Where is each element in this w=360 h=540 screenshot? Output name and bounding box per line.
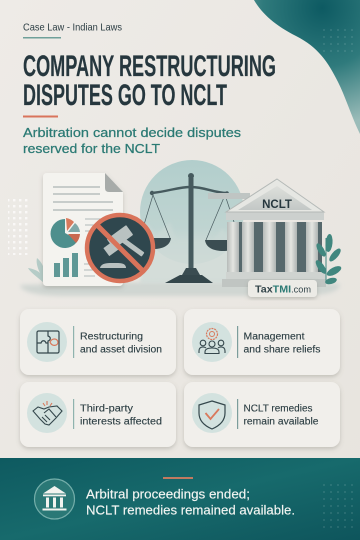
subtitle: [23, 125, 241, 156]
card: remedies: NCLT remedies: [244, 404, 312, 414]
teal corner shape: [254, 0, 360, 134]
icon: court building: [34, 479, 74, 519]
icon: shield check: [199, 401, 225, 429]
building label: NCLT: [262, 199, 292, 211]
subtitle: Arbitration cannot decide disputes: [23, 125, 241, 140]
icon: puzzle: [37, 331, 59, 353]
pie chart: [51, 218, 80, 248]
eyebrow label: [23, 22, 122, 38]
ground shadow: [20, 282, 340, 296]
plant left: [28, 258, 49, 283]
card: restructuring: and asset division: [80, 344, 162, 356]
subtitle: reserved for the NCLT: [23, 141, 160, 156]
card: restructuring: Restructuring: [80, 332, 143, 342]
card: management: and share reliefs: [244, 344, 320, 356]
icon: handshake: [33, 401, 62, 425]
faded skyline: [140, 222, 232, 283]
icon: people and gear: [199, 328, 225, 354]
gavel: [100, 225, 145, 268]
plant right: [314, 234, 343, 285]
footer message: Arbitral proceedings ended;: [86, 486, 250, 502]
no-gavel symbol: [87, 215, 153, 281]
card: remedies: remain available: [244, 416, 319, 428]
eyebrow label: Case Law - Indian Laws: [23, 22, 122, 34]
NCLT building: [208, 179, 326, 287]
card: management: [184, 309, 340, 375]
illustration: [8, 160, 343, 297]
title: [23, 50, 276, 112]
document: [43, 173, 123, 286]
TaxTMI badge: [248, 280, 317, 297]
footer banner: [0, 458, 360, 540]
card: third-party: [20, 382, 176, 447]
decorative dots left: [8, 197, 30, 255]
card: third-party: Third-party: [80, 404, 133, 414]
title accent rule: [23, 116, 58, 118]
bar chart: [54, 253, 78, 277]
card: third-party: interests affected: [80, 416, 162, 428]
card: remedies: [184, 382, 340, 447]
footer message: NCLT remedies remained available.: [86, 502, 295, 518]
card: restructuring: [20, 309, 176, 375]
card: management: Management: [244, 332, 305, 342]
footer message: [86, 486, 295, 518]
title: DISPUTES GO TO NCLT: [23, 79, 227, 112]
TaxTMI badge: TaxTMI.com: [255, 284, 311, 296]
scales of justice: [137, 173, 241, 283]
hero backdrop circle: [140, 160, 244, 264]
